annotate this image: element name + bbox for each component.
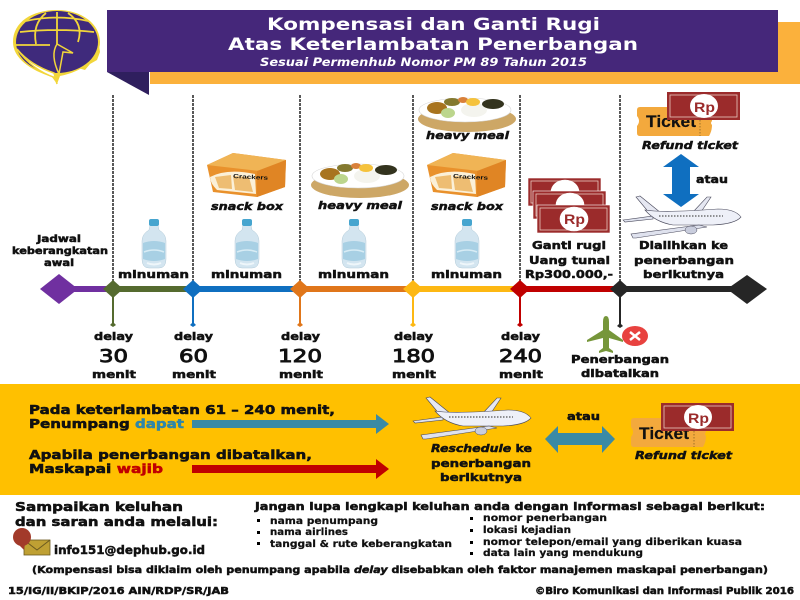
label: penerbangan dibatalkan: Penerbangan <box>571 354 669 366</box>
icon: water bottles <box>142 219 479 268</box>
labels: minuman: minuman <box>118 268 189 281</box>
label: jadwal keberangkatan awal: awal <box>44 258 74 269</box>
labels: delay markers: delay <box>501 331 540 343</box>
labels: delay markers: menit <box>279 369 323 381</box>
text: sampaikan keluhan: dan saran anda melalui: <box>15 515 218 529</box>
labels: minuman: minuman <box>431 268 502 281</box>
list: left: nama airlines <box>270 527 348 538</box>
arrow: blue double <box>663 154 699 207</box>
labels: food types: heavy meal <box>318 199 402 212</box>
labels: delay markers: delay <box>94 331 133 343</box>
icon: refund ticket top <box>637 92 740 136</box>
labels: food types: heavy meal <box>426 129 509 142</box>
list: left: tanggal & rute keberangkatan <box>270 539 452 550</box>
icon: refund ticket top: Ticket <box>646 112 696 131</box>
icon: meal plate 2 <box>418 97 516 132</box>
subtitle: Sesuai Permenhub Nomor PM 89 Tahun 2015 <box>260 55 587 69</box>
label: atau top: atau <box>696 174 728 186</box>
icon: crackers box 2 <box>427 153 506 197</box>
icon: meal plate 1 <box>311 163 409 198</box>
title: Atas Keterlambatan Penerbangan <box>228 35 638 55</box>
label: refund ticket: Refund ticket <box>635 449 733 462</box>
label: jadwal keberangkatan awal: Jadwal <box>36 234 81 245</box>
text: reschedule: penerbangan <box>431 457 531 470</box>
text: copyright: ©Biro Komunikasi dan Informasi Publik 2016 <box>535 586 794 597</box>
text: sampaikan keluhan <box>15 500 218 529</box>
text: reschedule: Reschedule ke <box>431 442 532 455</box>
labels: delay markers: delay <box>281 331 320 343</box>
end diamond <box>727 275 767 304</box>
arrow: teal double <box>545 426 615 453</box>
icon: plane <box>413 397 531 439</box>
label: atau: atau <box>567 411 600 423</box>
start diamond <box>40 274 78 304</box>
list: right <box>470 513 742 559</box>
text: jangan lupa heading: Jangan lupa lengkapi keluhan anda dengan informasi sebagai berikut: <box>254 500 765 513</box>
text: maskapai wajib: Apabila penerbangan dibatalkan, <box>29 448 312 462</box>
labels: minuman: minuman <box>211 268 282 281</box>
labels: delay markers <box>92 331 543 381</box>
labels: delay markers: menit <box>92 369 136 381</box>
labels: food types: snack box <box>431 200 504 213</box>
logo: Kementerian Perhubungan <box>13 10 100 84</box>
list: right: lokasi kejadian <box>483 525 571 536</box>
label: refund ticket top: Refund ticket <box>642 139 739 152</box>
labels: delay markers: 240 <box>499 346 542 367</box>
icon: plane top <box>623 196 741 238</box>
timeline <box>40 274 767 328</box>
icon: email <box>13 528 50 555</box>
text: penumpang dapat: Pada keterlambatan 61 – 240 menit, <box>29 403 335 417</box>
text: reschedule: berikutnya <box>440 471 522 484</box>
panel: yellow rules <box>0 384 800 495</box>
list: right: data lain yang mendukung <box>483 548 643 559</box>
labels: delay markers: delay <box>394 331 433 343</box>
label: jadwal keberangkatan awal: keberangkatan <box>12 246 108 257</box>
icon: crackers box 2: Crackers <box>453 174 489 182</box>
label: dialihkan: Dialihkan ke <box>639 239 728 252</box>
label: ganti rugi: Rp300.000,- <box>525 268 613 281</box>
labels: delay markers: menit <box>499 369 543 381</box>
label: ganti rugi: Uang tunai <box>529 254 610 267</box>
list: right: nomor telepon/email yang diberikan kuasa <box>483 537 742 548</box>
label: ganti rugi <box>525 239 613 281</box>
label: penerbangan dibatalkan: dibatalkan <box>581 368 659 380</box>
labels: food types <box>211 129 509 213</box>
labels: delay markers: delay <box>174 331 213 343</box>
icon: refund ticket: Rp <box>688 410 709 426</box>
labels: minuman <box>118 268 502 281</box>
title: Kompensasi dan Ganti Rugi <box>267 15 600 35</box>
title <box>228 15 638 55</box>
labels: delay markers: 30 <box>99 346 128 367</box>
labels: delay markers: 180 <box>392 346 435 367</box>
icon: refund ticket top: Rp <box>694 99 715 115</box>
icon: cancelled flight <box>587 316 648 353</box>
icon: crackers box 1 <box>207 153 286 197</box>
text: maskapai wajib: Maskapai wajib <box>29 462 164 476</box>
text: note: (Kompensasi bisa diklaim oleh penumpang apabila delay disebabkan oleh faktor manajemen maskapai penerbangan) <box>32 565 768 576</box>
label: dialihkan: berikutnya <box>643 268 724 281</box>
arrow: teal <box>192 414 389 434</box>
list: left: nama penumpang <box>270 516 378 527</box>
label: dialihkan: penerbangan <box>634 254 734 267</box>
text: maskapai wajib <box>29 448 312 476</box>
labels: delay markers: 120 <box>278 346 322 367</box>
labels: food types: snack box <box>211 200 284 213</box>
text: penumpang dapat: Penumpang dapat <box>29 417 184 431</box>
text: code: 15/IG/II/BKIP/2016 AIN/RDP/SR/JAB <box>8 586 229 597</box>
icon: money notes: Rp <box>564 211 585 227</box>
text: sampaikan keluhan: Sampaikan keluhan <box>15 500 183 514</box>
label: jadwal keberangkatan awal <box>12 234 108 269</box>
text: reschedule <box>431 442 532 484</box>
list: left <box>257 516 452 550</box>
labels: delay markers: menit <box>172 369 216 381</box>
icon: crackers box 1: Crackers <box>233 174 269 182</box>
icon: refund ticket: Ticket <box>639 424 689 443</box>
list: right: nomor penerbangan <box>483 513 607 524</box>
text: penumpang dapat <box>29 403 335 431</box>
labels: delay markers: menit <box>392 369 436 381</box>
text: email address: info151@dephub.go.id <box>54 543 205 557</box>
label: dialihkan <box>634 239 734 281</box>
icon: money notes <box>528 178 610 233</box>
label: ganti rugi: Ganti rugi <box>532 239 606 252</box>
labels: minuman: minuman <box>318 268 389 281</box>
arrow: red <box>192 459 389 479</box>
icon: refund ticket <box>631 403 734 447</box>
labels: delay markers: 60 <box>179 346 208 367</box>
label: penerbangan dibatalkan <box>571 354 669 380</box>
header banner <box>107 10 800 95</box>
